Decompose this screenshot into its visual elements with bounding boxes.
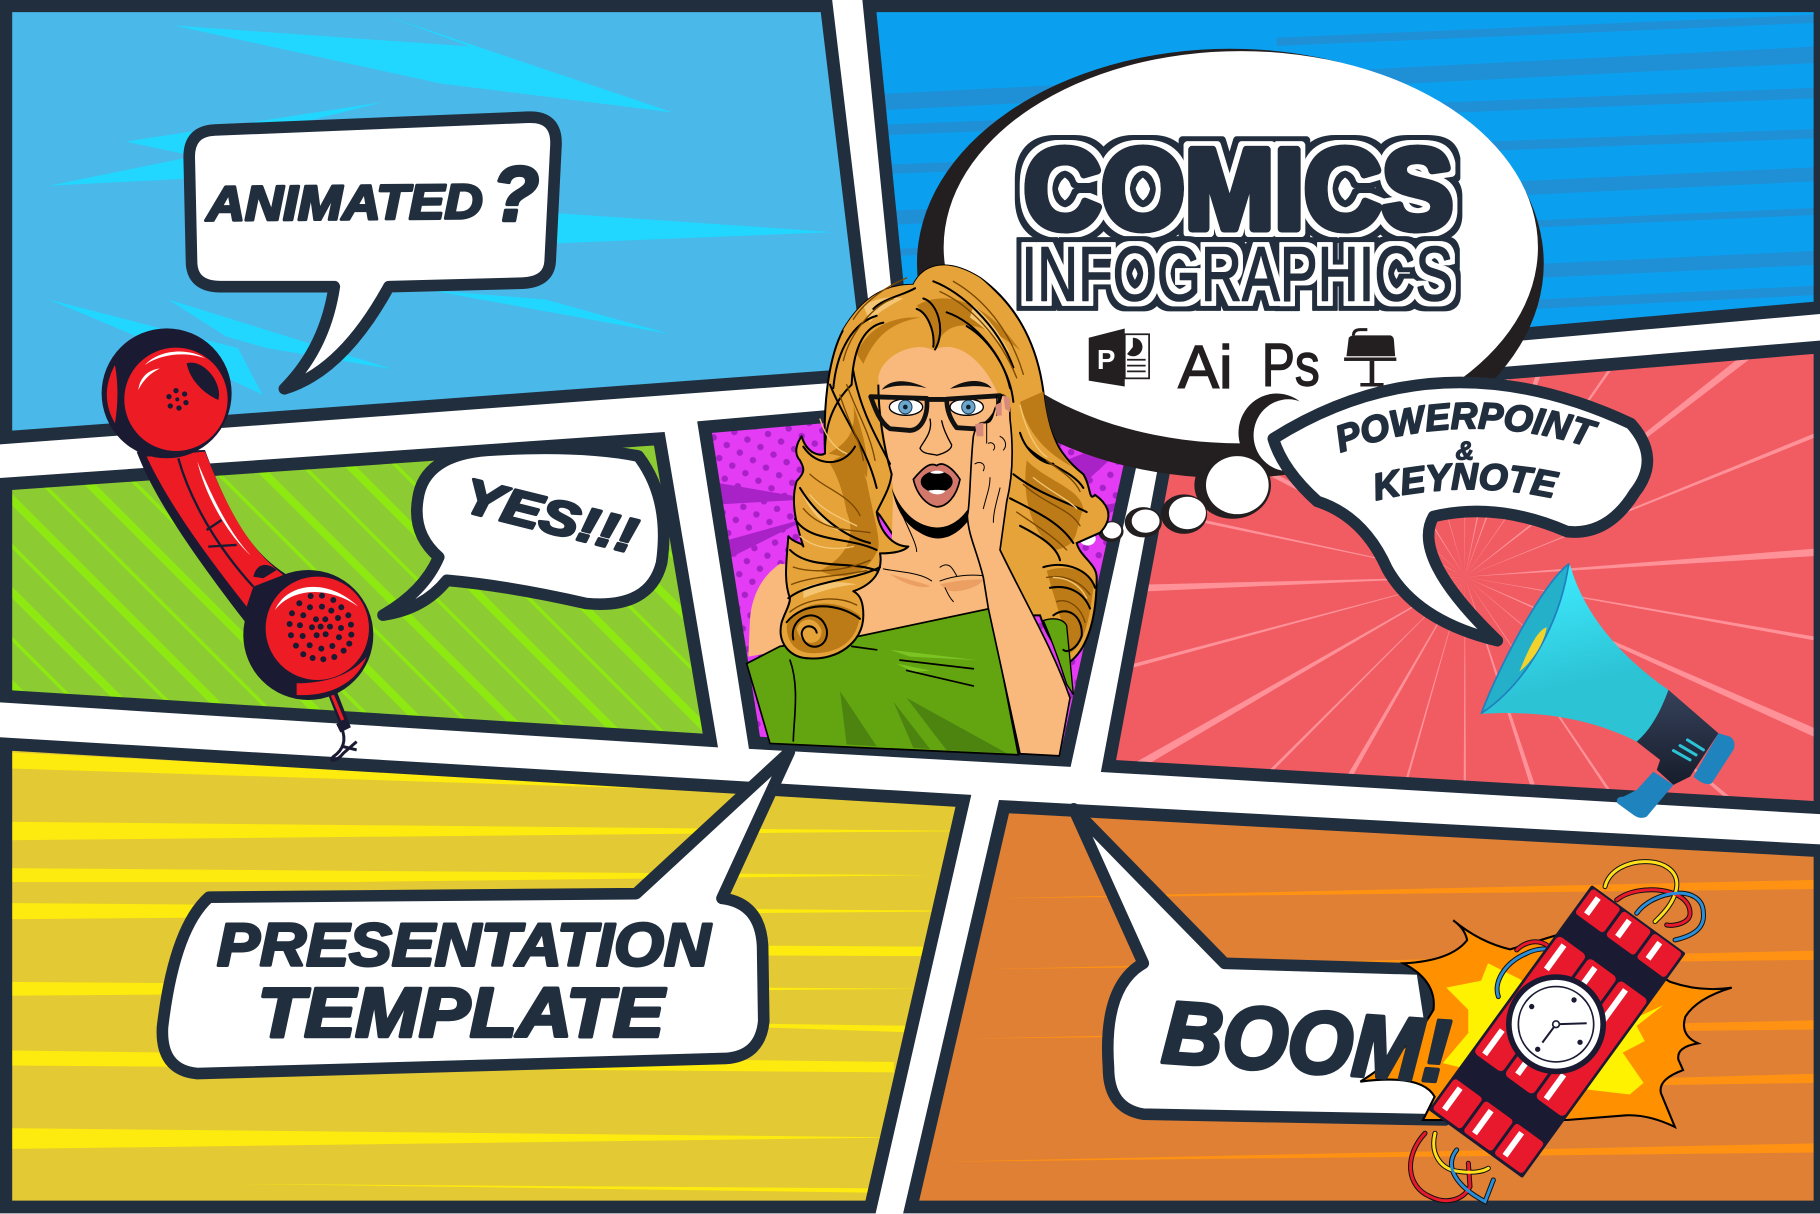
nose bbox=[920, 419, 952, 455]
panel title: COMICS: COMICS bbox=[1024, 127, 1453, 254]
icon: red telephone handset bbox=[102, 328, 373, 760]
bubble text bbox=[1337, 428, 1592, 454]
dress bbox=[747, 608, 1018, 755]
speech bubble: Boom! bbox=[1074, 809, 1445, 1120]
panel: green with diagonal stripes bbox=[0, 432, 718, 748]
panel subtitle: INFOGRAPHICS: INFOGRAPHICS bbox=[1021, 233, 1453, 318]
mouthpiece bbox=[243, 570, 373, 700]
wires bbox=[1410, 862, 1703, 1202]
left hair front lobes bbox=[781, 385, 908, 659]
icon: PowerPoint logo bbox=[1089, 328, 1149, 386]
speech bubble: Presentation Template bbox=[162, 752, 789, 1074]
main title speech bubble bbox=[917, 49, 1544, 478]
icon: dynamite bomb with clock bbox=[1410, 862, 1703, 1202]
neck and chest bbox=[748, 481, 1070, 757]
icon: PowerPoint logo: P bbox=[1097, 344, 1115, 375]
left hair shading bbox=[787, 405, 879, 653]
bubble text: PRESENTATION bbox=[217, 911, 712, 979]
hair mass bbox=[825, 265, 1108, 662]
cord bbox=[330, 687, 345, 728]
logo label: Ps: Ps bbox=[1262, 330, 1320, 398]
hand and arm bbox=[967, 395, 1070, 756]
speech bubble: PowerPoint & Keynote: POWERPOINT bbox=[1336, 402, 1600, 454]
clock bbox=[1506, 974, 1606, 1074]
collarbone shade bbox=[890, 574, 983, 591]
panel: red sunburst bbox=[1100, 340, 1820, 814]
hair strands bbox=[787, 281, 1095, 651]
neck lines bbox=[883, 502, 983, 602]
icon: blue megaphone bbox=[1481, 564, 1735, 818]
logo label: Ai: Ai bbox=[1178, 333, 1233, 401]
speech bubble: PowerPoint & Keynote: & bbox=[1456, 438, 1474, 466]
speech bubble: PowerPoint & Keynote bbox=[1268, 376, 1654, 646]
icon: Keynote logo bbox=[1344, 330, 1396, 386]
eyebrows bbox=[882, 381, 992, 390]
thought bubbles trail bbox=[1079, 393, 1323, 545]
panel: orange with stripes bbox=[911, 807, 1820, 1207]
top hair overlay bbox=[843, 265, 1037, 398]
panel: top-right blue with stripes bbox=[862, 0, 1820, 340]
right hair shading bbox=[1020, 392, 1093, 653]
speech bubble: PowerPoint & Keynote: KEYNOTE bbox=[1375, 462, 1560, 501]
top hair shading bbox=[857, 298, 1020, 364]
speech bubble: Presentation Template: TEMPLATE bbox=[258, 973, 667, 1051]
eyes bbox=[889, 399, 923, 415]
panel: yellow with stripes bbox=[6, 744, 998, 1207]
face bbox=[878, 347, 998, 528]
chin shadow bbox=[892, 488, 968, 538]
handle bbox=[137, 450, 290, 622]
illustration: surprised woman with glasses bbox=[747, 265, 1108, 757]
glasses bbox=[871, 396, 1000, 430]
boom text: BOOM! bbox=[1159, 982, 1453, 1101]
bubble text: YES!!! bbox=[458, 469, 642, 564]
speech bubble: Animated?: ? bbox=[492, 153, 539, 238]
sticks bbox=[1428, 885, 1686, 1178]
speech bubble: Yes!!! bbox=[383, 448, 664, 615]
icon: explosion behind bomb bbox=[1360, 920, 1732, 1127]
earpiece bbox=[102, 328, 232, 458]
panel: top-left blue with speed rays bbox=[6, 6, 871, 438]
mouth bbox=[913, 464, 960, 507]
speech bubble: Animated? bbox=[189, 117, 556, 389]
panel: magenta halftone centre bbox=[697, 410, 1136, 767]
bubble text: ANIMATED bbox=[205, 175, 483, 232]
